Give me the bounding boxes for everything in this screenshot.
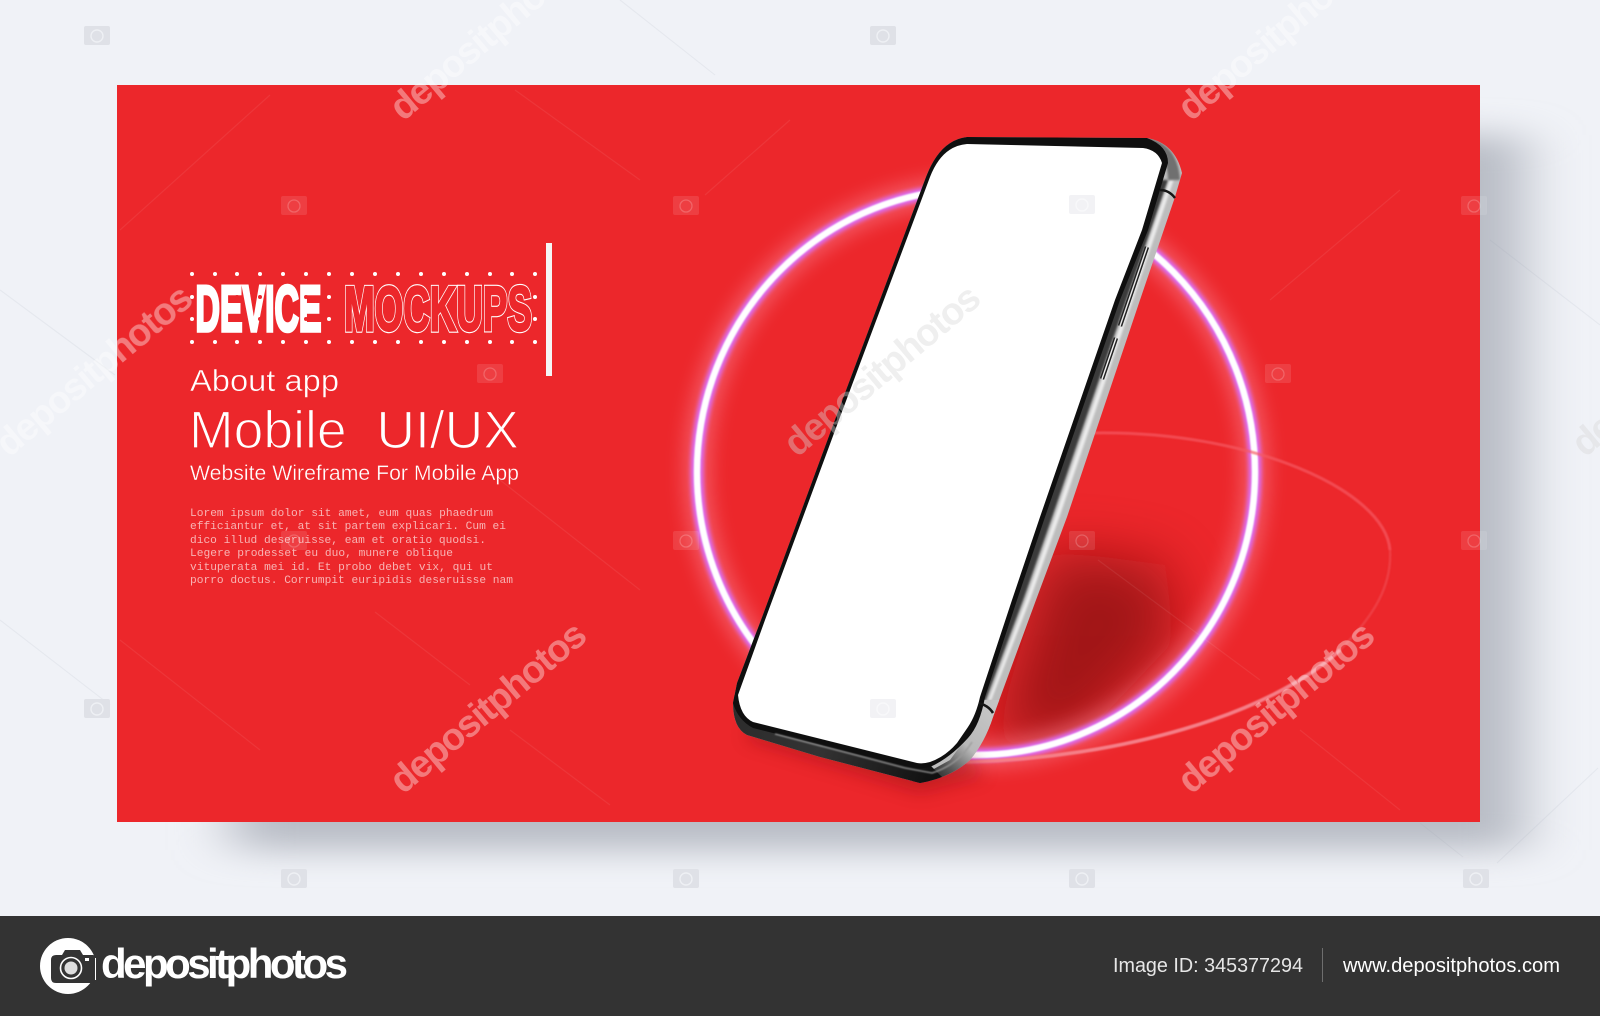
text: subtitle: Website Wireframe For Mobile App [190,462,519,485]
phone antenna bands [1160,190,1175,198]
neon ring [697,189,1255,755]
lower antenna band [978,703,993,713]
lorem ipsum paragraph: Legere prodesset eu duo, munere oblique [190,548,453,560]
watermark tiles: depositphotos [1170,614,1383,802]
lorem ipsum paragraph: dico illud deseruisse, eam et oratio quodsi. [190,535,486,547]
lorem ipsum paragraph: vituperata mei id. Et probo debet vix, qui ut [190,562,493,574]
watermark tiles: depositphotos [776,277,989,465]
footer logo [40,938,348,994]
title dot grid [190,272,537,344]
footer bar [0,916,1600,1016]
phone bottom edge [733,695,942,783]
lorem ipsum paragraph: efficiantur et, at sit partem explicari. Cum ei [190,521,506,533]
vertical accent bar [546,243,552,376]
title: MOCKUPS outlined: MOCKUPS [344,274,532,344]
footer divider [1322,948,1323,982]
bottom edge highlight [775,734,972,773]
logo wordmark: depositphotos [101,940,348,987]
footer url: www.depositphotos.com [1342,954,1560,977]
phone blank screen [738,144,1162,763]
phone bottom corner metal [912,700,1000,783]
phone side shading bands [730,138,1180,792]
footer image id: Image ID: 345377294 [1113,955,1303,977]
lorem ipsum paragraph [190,508,513,587]
phone cast shadow [992,550,1175,745]
text: Mobile UI/UX: Mobile UI/UX [189,401,519,460]
thin orbit ellipse [966,433,1390,762]
title: MOCKUPS outlined [344,274,532,344]
logo camera icon [40,938,96,994]
lorem ipsum paragraph: Lorem ipsum dolor sit amet, eum quas phaedrum [190,508,493,520]
title: DEVICE: DEVICE [196,272,322,345]
panel: red banner [117,85,1480,822]
panel shadow [232,135,1525,850]
phone underside shadow [745,718,985,792]
text: About app: About app [190,363,339,398]
phone black bezel [733,137,1168,769]
title: MOCKUPS outlined: MOCKUPS [344,274,532,344]
dots over DEVICE letters [235,295,308,321]
volume buttons [1102,247,1147,379]
phone metal body [733,137,1182,783]
watermark tiles: depositphotos [382,614,595,802]
phone mockup [730,137,1182,792]
lorem ipsum paragraph: porro doctus. Corrumpit euripidis deseruisse nam [190,575,513,587]
